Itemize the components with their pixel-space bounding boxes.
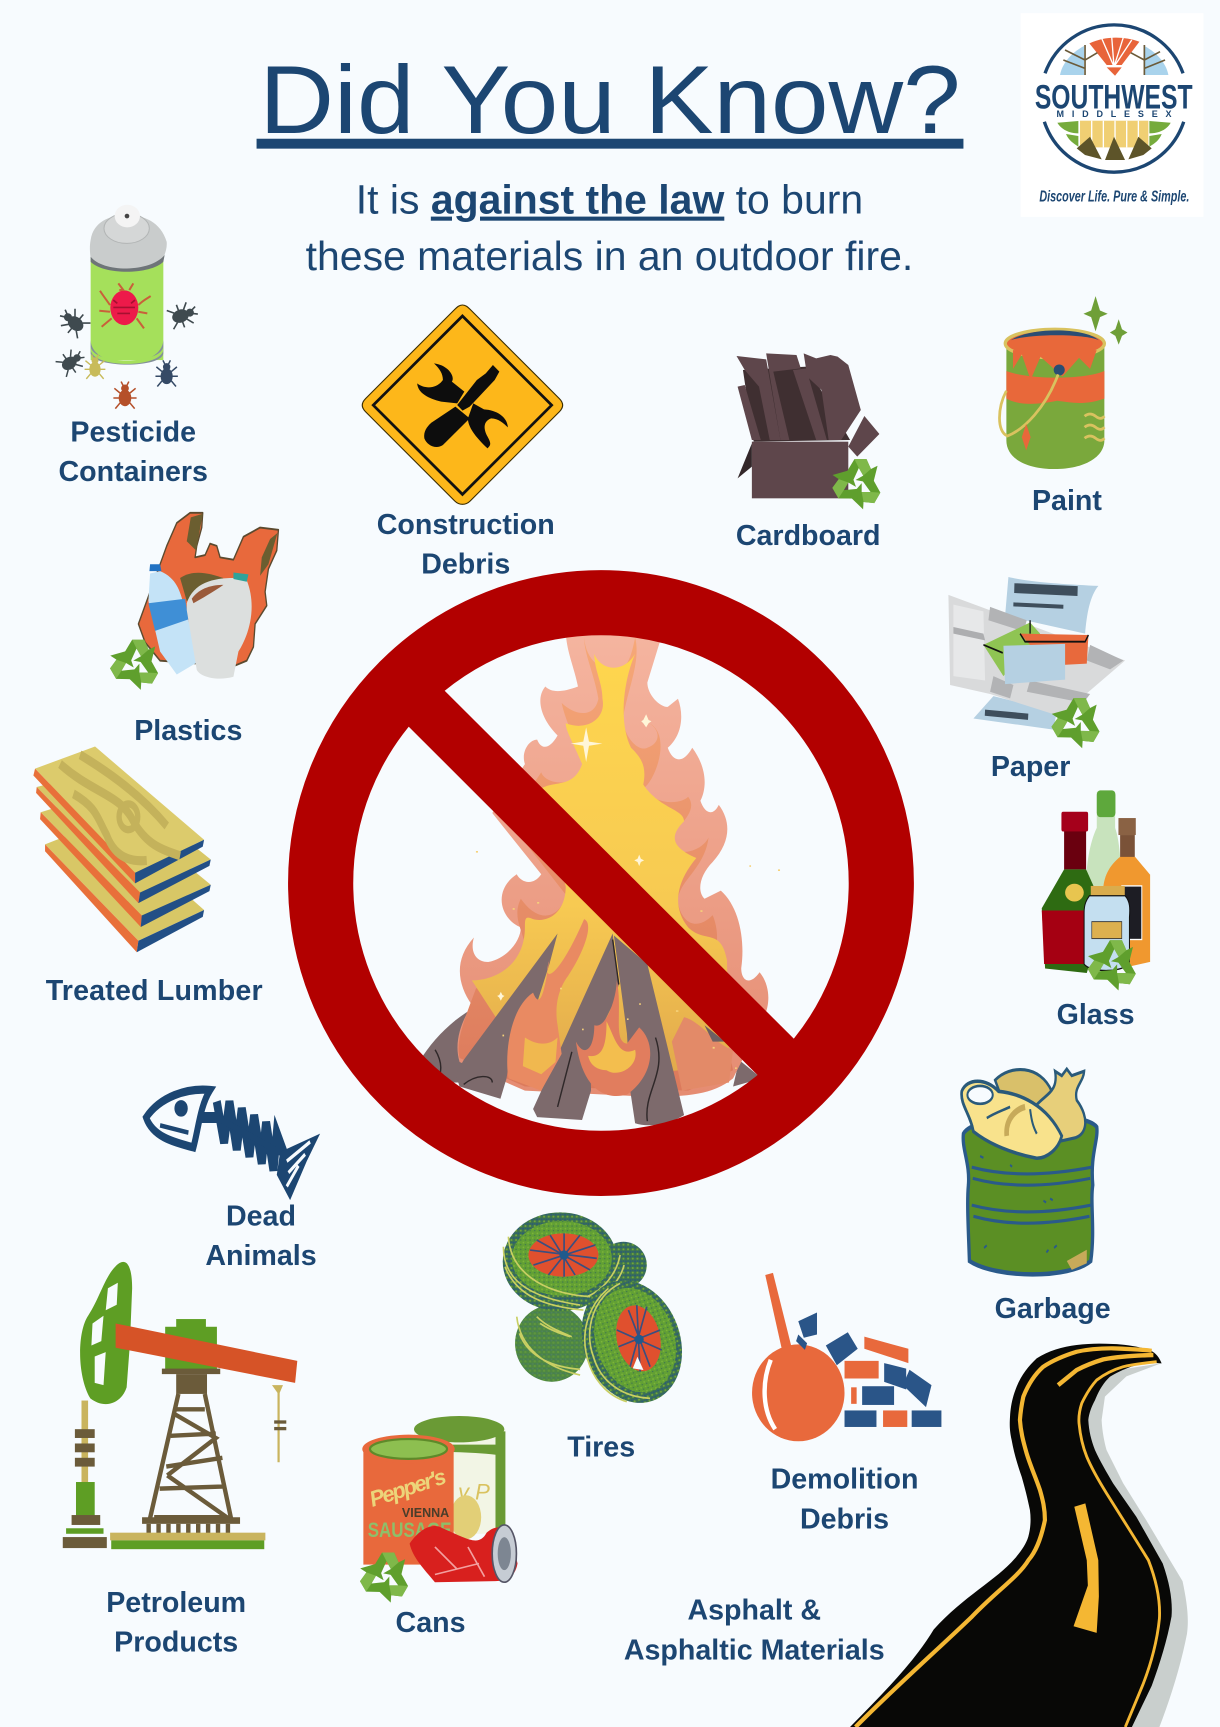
label: petroleum products: Products bbox=[114, 1627, 238, 1659]
icon: treated lumber stack bbox=[33, 747, 211, 952]
label: paint: Paint bbox=[1032, 485, 1102, 517]
label: demolition debris: Debris bbox=[800, 1503, 889, 1535]
label: construction debris: Debris bbox=[421, 549, 510, 581]
icon: wrecking ball and bricks bbox=[752, 1273, 941, 1441]
label: asphalt: Asphalt & bbox=[687, 1595, 821, 1627]
icon: cardboard box bbox=[737, 353, 885, 513]
label: paper: Paper bbox=[991, 751, 1070, 783]
label: garbage: Garbage bbox=[995, 1293, 1111, 1325]
subtitle: It is against the law to burn bbox=[356, 177, 863, 223]
icon: asphalt road bbox=[850, 1344, 1188, 1727]
label: cardboard: Cardboard bbox=[736, 520, 881, 552]
icon: construction sign bbox=[362, 305, 563, 504]
label: glass: Glass bbox=[1057, 999, 1135, 1031]
icon: paper pile bbox=[948, 577, 1125, 752]
label: dead animals: Animals bbox=[205, 1240, 317, 1272]
icon: paint can bbox=[999, 296, 1127, 469]
icon: garbage barrel bbox=[962, 1069, 1097, 1274]
no symbol: red prohibition ring and bar bbox=[321, 603, 881, 1163]
label: treated lumber: Treated Lumber bbox=[46, 975, 263, 1007]
label: plastics: Plastics bbox=[134, 715, 242, 747]
icon: oil pump jack bbox=[63, 1262, 297, 1549]
icon: campfire bbox=[423, 629, 780, 1125]
logo: Southwest Middlesex: MIDDLESEX bbox=[1057, 109, 1172, 119]
icon: cans: Pepper's bbox=[366, 1464, 449, 1512]
title: Did You Know? bbox=[259, 45, 961, 154]
icon: tires bbox=[503, 1212, 699, 1417]
icon: pesticide spray can with bugs bbox=[55, 205, 201, 409]
subtitle: these materials in an outdoor fire. bbox=[306, 233, 913, 279]
icon: glass bottles bbox=[1042, 790, 1150, 994]
icon: plastics bag and bottles bbox=[105, 513, 278, 693]
label: petroleum products: Petroleum bbox=[106, 1587, 246, 1619]
logo: Southwest Middlesex bbox=[1021, 13, 1203, 217]
label: cans: Cans bbox=[396, 1607, 466, 1639]
label: pesticide containers: Containers bbox=[59, 456, 208, 488]
label: tires: Tires bbox=[567, 1432, 635, 1464]
icon: cans: y P bbox=[456, 1480, 490, 1505]
icon: cans: VIENNA bbox=[402, 1505, 450, 1520]
icon: cans: SAUSAGE bbox=[368, 1519, 451, 1542]
label: construction debris: Construction bbox=[377, 509, 555, 541]
label: pesticide containers: Pesticide bbox=[70, 417, 196, 449]
icon: fish skeleton bbox=[146, 1090, 320, 1200]
label: asphalt: Asphaltic Materials bbox=[624, 1634, 885, 1666]
label: demolition debris: Demolition bbox=[771, 1464, 918, 1496]
label: dead animals: Dead bbox=[226, 1200, 296, 1232]
title underline bbox=[257, 139, 963, 149]
icon: cans bbox=[354, 1416, 518, 1606]
